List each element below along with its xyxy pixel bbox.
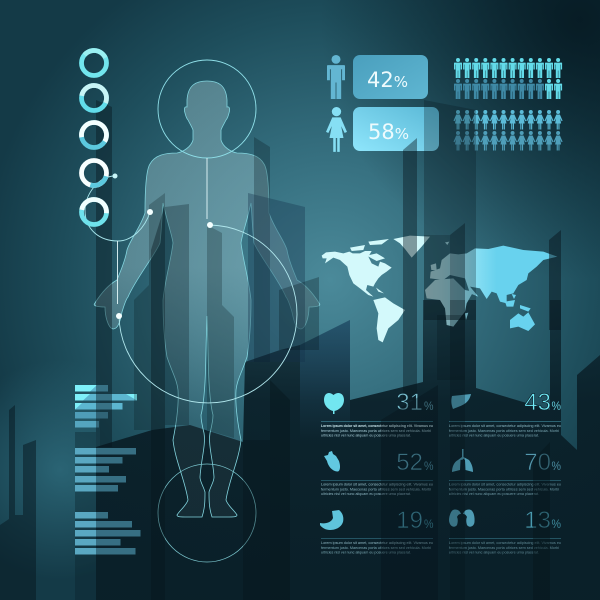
- stat: brain 31%: ultricies nisl vel nunc aliquam eu posuere urna placerat.: [321, 432, 411, 438]
- stat card: men 42%: 42%: [367, 68, 408, 92]
- men row 1: [454, 58, 562, 78]
- icon: lungs: [452, 449, 473, 472]
- bar chart: middle: [75, 448, 136, 492]
- icon: heart: [324, 451, 340, 472]
- stat: kidneys 13%: 13: [524, 507, 551, 534]
- callout dots: [112, 174, 213, 319]
- ring 3: [80, 121, 108, 149]
- stat: heart 52%: fermentum justo. Maecenas porta ultrices sem sed vehicula. Morbi: [321, 486, 431, 492]
- stat: heart 52%: 52: [396, 449, 423, 476]
- stat: heart 52%: %: [424, 459, 434, 473]
- stat: liver 43%: Lorem ipsum dolor sit amet, consectetur adipiscing elit. Vivamus eu: [449, 423, 561, 428]
- icon: woman: [326, 107, 347, 152]
- callout connectors: [85, 158, 297, 403]
- stat: brain 31%: %: [424, 399, 434, 413]
- stat: lungs 70%: Lorem ipsum dolor sit amet, consectetur adipiscing elit. Vivamus eu: [449, 482, 561, 486]
- women row 1: [454, 110, 563, 130]
- head circle: [158, 60, 256, 158]
- connector: chest: [206, 158, 208, 219]
- stat: lungs 70%: 70: [524, 449, 551, 476]
- organ stats grid: [320, 389, 561, 554]
- skyline columns over body: [96, 100, 319, 447]
- stat: liver 43%: %: [552, 399, 561, 413]
- icon: brain: [324, 393, 344, 414]
- feet circle: [158, 464, 256, 562]
- stat: kidneys 13%: [449, 507, 561, 554]
- stat: lungs 70%: fermentum justo. Maecenas porta ultrices sem sed vehicula. Morbi: [449, 486, 559, 492]
- stat: stomach 19%: fermentum justo. Maecenas porta ultrices sem sed vehicula. Morbi: [321, 545, 431, 550]
- stat: liver 43%: [449, 389, 561, 438]
- ring 5: [80, 198, 108, 226]
- skyline columns over map and cards: [403, 100, 561, 400]
- icon: kidneys: [449, 510, 475, 527]
- stat: brain 31%: 31: [396, 389, 423, 416]
- stat: stomach 19%: Lorem ipsum dolor sit amet, consectetur adipiscing elit. Vivamus eu: [321, 540, 433, 545]
- ring 2: [80, 84, 108, 112]
- icon: man: [327, 55, 345, 99]
- world map: [322, 236, 557, 342]
- stat: kidneys 13%: Lorem ipsum dolor sit amet, consectetur adipiscing elit. Vivamus eu: [449, 540, 561, 545]
- stat: heart 52%: [321, 449, 434, 496]
- stat: lungs 70%: ultricies nisl vel nunc aliquam eu posuere urna placerat.: [449, 491, 539, 496]
- stat: heart 52%: Lorem ipsum dolor sit amet, consectetur adipiscing elit. Vivamus eu: [321, 482, 433, 486]
- human body figure: [94, 81, 320, 517]
- stat card: men 42%: [353, 55, 428, 99]
- stat: stomach 19%: [320, 507, 434, 554]
- connector: large body arc: [119, 225, 297, 403]
- stat card: women 58%: [353, 107, 439, 151]
- women row 2: [454, 131, 563, 150]
- stat: liver 43%: ultricies nisl vel nunc aliquam eu posuere urna placerat.: [449, 432, 539, 438]
- skyline columns over stats: [151, 300, 550, 600]
- ring 4: [79, 158, 109, 188]
- men row 2: [454, 79, 562, 99]
- progress rings: [76, 45, 112, 226]
- stat: brain 31%: [321, 389, 434, 438]
- stat: heart 52%: ultricies nisl vel nunc aliquam eu posuere urna placerat.: [321, 491, 411, 496]
- stat: brain 31%: fermentum justo. Maecenas porta ultrices sem sed vehicula. Morbi: [321, 428, 431, 433]
- stat: liver 43%: 43: [524, 389, 551, 416]
- stat: stomach 19%: 19: [396, 507, 423, 534]
- pictogram: men: [454, 58, 562, 99]
- stat: brain 31%: Lorem ipsum dolor sit amet, consectetur adipiscing elit. Vivamus eu: [321, 423, 434, 428]
- pictogram: women: [454, 110, 563, 150]
- bar chart: top: [75, 385, 137, 428]
- connector: hand: [116, 241, 118, 304]
- bar charts: [75, 385, 140, 554]
- stat: kidneys 13%: %: [552, 517, 561, 531]
- stat: kidneys 13%: ultricies nisl vel nunc aliquam eu posuere urna placerat.: [449, 550, 539, 554]
- stat: kidneys 13%: fermentum justo. Maecenas porta ultrices sem sed vehicula. Morbi: [449, 545, 559, 550]
- connector: arm arc: [85, 176, 150, 241]
- ring 1: [76, 45, 112, 81]
- icon: liver: [451, 394, 471, 409]
- stat card: women 58%: 58%: [368, 120, 409, 144]
- stat: lungs 70%: [449, 449, 561, 496]
- stat: lungs 70%: %: [552, 459, 561, 473]
- bar chart: bottom: [75, 512, 140, 554]
- dark lower skyline: [0, 300, 600, 600]
- icon: stomach: [320, 510, 343, 530]
- stat: stomach 19%: %: [424, 517, 434, 531]
- stat: stomach 19%: ultricies nisl vel nunc aliquam eu posuere urna placerat.: [321, 550, 411, 554]
- stat: liver 43%: fermentum justo. Maecenas porta ultrices sem sed vehicula. Morbi: [449, 428, 559, 433]
